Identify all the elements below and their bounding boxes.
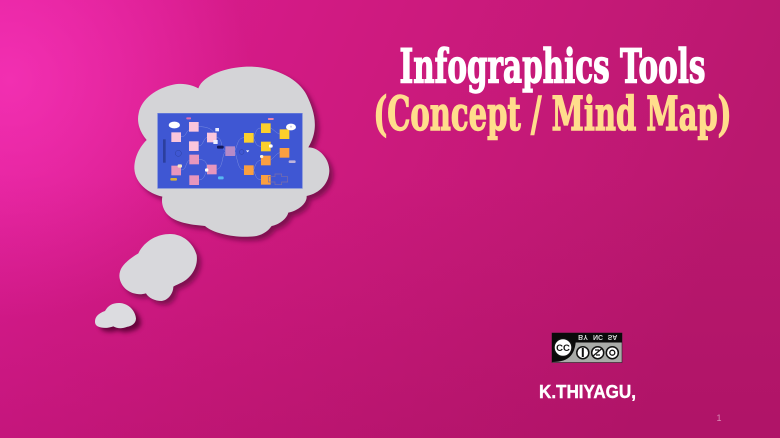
central node [225, 146, 235, 156]
mind map image [158, 113, 302, 188]
by icon [577, 347, 589, 359]
nc icon [592, 347, 604, 359]
badge top labels: BY [578, 333, 588, 340]
sa icon [606, 347, 618, 359]
badge top labels: SA [608, 333, 617, 340]
badge top labels: NC [593, 333, 603, 340]
right nodes [244, 123, 289, 185]
licence badge: creative commons [552, 333, 622, 362]
page number: 1 [716, 413, 722, 423]
thought bubble: large cloud [134, 67, 333, 241]
small decorations [163, 117, 296, 185]
badge top labels [578, 333, 617, 340]
author name: K.THIYAGU, [539, 382, 636, 402]
left nodes [171, 122, 217, 185]
thought bubble: small cloud [95, 303, 141, 332]
title [374, 40, 732, 142]
thought bubble: medium cloud [119, 234, 201, 305]
cc logo: CC [556, 343, 570, 354]
